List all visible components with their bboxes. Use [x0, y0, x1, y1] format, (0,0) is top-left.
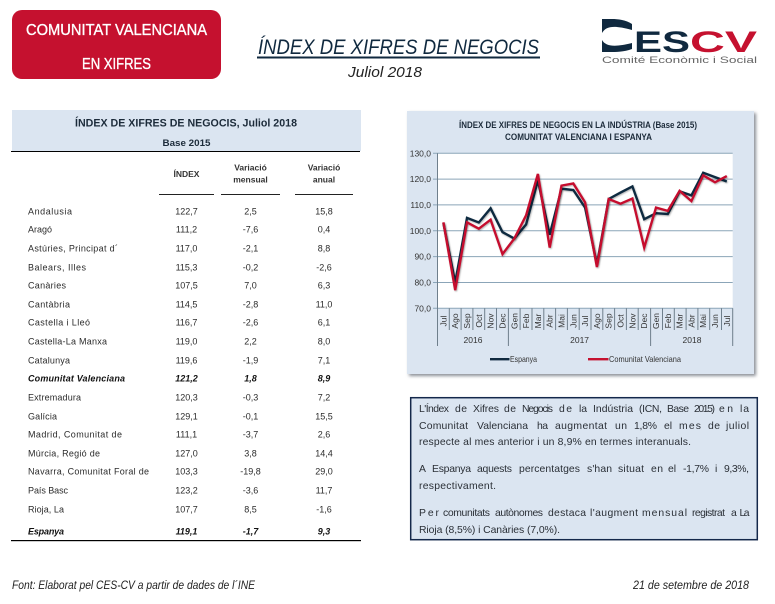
paragraph 2: respectivament. — [419, 481, 496, 492]
paragraph 1: de — [504, 404, 516, 415]
table rows: -0,2 — [243, 262, 258, 272]
table rows: 11,0 — [316, 300, 332, 310]
paragraph 1: de — [455, 404, 467, 415]
paragraph 3: registrat — [692, 508, 725, 519]
y axis labels: 130,0 — [410, 148, 431, 158]
paragraph 3: Per — [419, 508, 440, 519]
table rows: 8,0 — [318, 336, 330, 346]
table rows: 15,8 — [315, 206, 333, 216]
table heading: Base 2015 — [162, 138, 211, 149]
paragraph 2: el — [668, 464, 676, 475]
table rows: -1,7 — [243, 526, 259, 536]
table rows: 8,8 — [318, 244, 330, 254]
paragraph 1: mes — [679, 421, 701, 432]
subtitle: period: Juliol 2018 — [347, 64, 423, 81]
chart title: ÍNDEX DE XIFRES DE NEGOCIS EN LA INDÚSTRIA (Base 2015) — [459, 119, 697, 130]
panel: summary text — [411, 398, 757, 540]
paragraph 3: comunitats — [443, 508, 490, 519]
x axis month labels — [438, 313, 732, 329]
table rows: 123,2 — [175, 486, 198, 496]
table rows: País Basc — [28, 486, 68, 496]
x axis month labels: Sep — [604, 313, 614, 329]
table rows: 119,1 — [176, 526, 197, 536]
table rows: Andalusia — [28, 206, 72, 216]
paragraph 3: destaca — [548, 508, 586, 519]
table rows: Castella-La Manxa — [28, 336, 107, 346]
x axis month labels: Nov — [486, 313, 496, 329]
y axis labels: 110,0 — [410, 200, 431, 210]
table rows: -3,6 — [243, 486, 258, 496]
table rows: 111,1 — [176, 430, 197, 440]
table rows: -1,6 — [316, 504, 332, 514]
table rows — [28, 206, 333, 536]
logo: CES CV: ES — [634, 26, 690, 59]
paragraph 3: Rioja (8,5%) i Canàries (7,0%). — [419, 525, 560, 536]
column headers: Variació — [308, 162, 340, 172]
paragraph 3: a — [731, 508, 737, 519]
paragraph 1: Base — [667, 404, 689, 415]
table rows: 114,5 — [176, 300, 197, 310]
paragraph 1: un — [615, 421, 627, 432]
panel: data table — [11, 110, 361, 541]
x axis month labels: Jun — [710, 314, 720, 328]
paragraph 1: Xifres — [473, 404, 499, 415]
table rows: Cantàbria — [28, 300, 70, 310]
table rows: 2,2 — [244, 336, 257, 346]
table rows: -2,6 — [243, 318, 258, 328]
table rows: 0,4 — [318, 224, 330, 234]
series: Comunitat Valenciana — [443, 174, 727, 290]
logo: CES CV: Comité Econòmic i Social — [602, 55, 757, 66]
column headers: anual — [313, 174, 335, 184]
plot area — [438, 153, 733, 308]
paragraph 2: aquests — [477, 464, 512, 475]
column headers — [159, 162, 353, 195]
table heading — [11, 110, 361, 152]
x axis month labels: Dec — [639, 313, 649, 329]
y axis labels: 90,0 — [414, 252, 431, 262]
table rows: Aragó — [28, 224, 52, 234]
table rows: Comunitat Valenciana — [28, 374, 125, 384]
table rows: -2,8 — [243, 300, 258, 310]
paragraph 2: 9,3%, — [724, 464, 749, 475]
y axis labels: 120,0 — [410, 174, 431, 184]
x axis month labels: Mai — [698, 314, 708, 328]
table rows: -1,9 — [243, 356, 258, 366]
table rows: 122,7 — [175, 206, 198, 216]
table rows: 117,0 — [176, 244, 197, 254]
table rows: Navarra, Comunitat Foral de — [28, 466, 149, 476]
paragraph 1: L'Índex — [419, 402, 450, 415]
table rows: 6,1 — [318, 318, 330, 328]
table rows: 1,8 — [244, 374, 257, 384]
x axis month labels: Abr — [545, 314, 555, 328]
x axis month labels: Sep — [462, 313, 472, 329]
x axis month labels: Mai — [556, 314, 566, 328]
table rows: 119,6 — [176, 356, 197, 366]
table rows: 107,5 — [175, 280, 198, 290]
chart title: COMUNITAT VALENCIANA I ESPANYA — [505, 132, 652, 142]
paragraph 1: juliol — [725, 421, 749, 432]
paragraph 2: -1,7% — [683, 464, 709, 475]
column headers: mensual — [233, 174, 268, 184]
x axis month labels: Nov — [627, 313, 637, 329]
table rows: 14,4 — [315, 448, 333, 458]
table rows: 8,9 — [318, 374, 330, 384]
x axis month labels: Jun — [568, 314, 578, 328]
x axis month labels: Dec — [498, 313, 508, 329]
x axis month labels: Jul — [580, 315, 590, 326]
x axis year labels: 2017 — [570, 335, 589, 345]
x axis month labels: Oct — [474, 314, 484, 328]
badge: Comunitat Valenciana en xifres: COMUNITAT VALENCIANA — [26, 22, 208, 39]
paragraph 1: Valenciana — [477, 421, 528, 432]
paragraph 1: Indústria — [593, 404, 633, 415]
legend: Comunitat Valenciana — [609, 354, 681, 364]
paragraph 1: la — [740, 404, 749, 415]
table rows: Catalunya — [28, 356, 70, 366]
paragraph 2: percentatges — [519, 464, 580, 475]
paragraph 1: en — [719, 404, 733, 415]
table rows: Madrid, Comunitat de — [28, 430, 122, 440]
date: 21 de setembre de 2018 — [632, 580, 750, 592]
table rows: Extremadura — [28, 392, 81, 402]
badge: Comunitat Valenciana en xifres — [12, 10, 221, 79]
paragraph 1: Negocis — [522, 404, 553, 415]
table rows: 29,0 — [315, 466, 333, 476]
badge: Comunitat Valenciana en xifres: EN XIFRES — [82, 56, 151, 73]
paragraph 2: A — [419, 464, 426, 475]
table rows: 6,3 — [318, 280, 330, 290]
paragraph 3 — [419, 508, 750, 536]
table rows: 9,3 — [318, 526, 330, 536]
table rows: -3,7 — [243, 430, 258, 440]
paragraph 3: autònomes — [495, 508, 543, 519]
column headers: Variació — [234, 162, 267, 172]
table rows: 103,3 — [175, 466, 198, 476]
table rows: Rioja, La — [28, 504, 64, 514]
table rows: Espanya — [28, 526, 64, 536]
table rows: Múrcia, Regió de — [28, 448, 100, 458]
table rows: 119,0 — [176, 336, 197, 346]
table rows: Castella i Lleó — [28, 318, 90, 328]
x axis year labels — [464, 335, 702, 345]
table rows: Canàries — [28, 280, 66, 290]
table rows: 3,8 — [244, 448, 257, 458]
paragraph 1: el — [664, 421, 672, 432]
logo: CES CV: CV — [690, 26, 757, 59]
paragraph 3: La — [740, 508, 750, 519]
paragraph 1: Comunitat — [419, 421, 468, 432]
logo: CES CV — [602, 19, 757, 66]
x axis year labels: 2018 — [683, 335, 702, 345]
paragraph 2 — [419, 464, 749, 492]
paragraph 1: 2015) — [694, 404, 715, 415]
x axis month labels: Ago — [592, 313, 602, 329]
y axis labels: 70,0 — [414, 303, 431, 313]
table rows: 116,7 — [176, 318, 197, 328]
table rows: 120,3 — [175, 392, 198, 402]
paragraph 1: de — [708, 421, 720, 432]
table rows: Galícia — [28, 412, 57, 422]
series: Espanya — [443, 173, 727, 282]
paragraph 2: i — [715, 464, 717, 475]
paragraph 2: s'han — [587, 464, 612, 475]
table rows: 7,0 — [244, 280, 257, 290]
table rows: 121,2 — [175, 374, 198, 384]
table rows: 129,1 — [175, 412, 198, 422]
table rows: 115,3 — [176, 262, 197, 272]
y axis labels: 100,0 — [410, 226, 431, 236]
table rows: 15,5 — [315, 412, 333, 422]
table rows: -2,6 — [316, 262, 332, 272]
x axis year labels: 2016 — [464, 335, 483, 345]
paragraph 1: la — [579, 404, 587, 415]
x axis month labels: Feb — [521, 313, 531, 328]
x axis month labels: Gen — [651, 313, 661, 329]
paragraph 1: 1,8% — [634, 421, 657, 432]
x axis month labels: Jul — [438, 315, 448, 326]
paragraph 2: en — [651, 464, 663, 475]
legend: Espanya — [510, 354, 537, 364]
paragraph 1: respecte al mes anterior i un 8,9% en termes interanuals. — [419, 437, 691, 448]
paragraph 1 — [419, 402, 749, 448]
table rows: 7,2 — [318, 392, 330, 402]
table rows: 8,5 — [244, 504, 257, 514]
paragraph 1: (ICN, — [639, 404, 662, 415]
table rows: 111,2 — [176, 224, 197, 234]
x axis month labels: Feb — [663, 313, 673, 328]
title: ÍNDEX DE XIFRES DE NEGOCIS — [258, 36, 539, 59]
panel: line chart — [407, 111, 756, 376]
table rows: -0,1 — [243, 412, 258, 422]
x axis month labels: Ago — [450, 313, 460, 329]
table rows: 127,0 — [175, 448, 198, 458]
chart title — [459, 119, 697, 142]
paragraph 1: de — [559, 404, 572, 415]
table rows: -0,3 — [243, 392, 258, 402]
table heading: ÍNDEX DE XIFRES DE NEGOCIS, Juliol 2018 — [75, 116, 297, 130]
table rows: 2,6 — [318, 430, 330, 440]
x axis month labels: Oct — [616, 314, 626, 328]
y axis labels: 80,0 — [414, 278, 431, 288]
paragraph 1: augmentat — [555, 421, 607, 432]
table rows: -7,6 — [243, 224, 258, 234]
table rows: 7,1 — [318, 356, 330, 366]
x axis month labels: Jul — [722, 315, 732, 326]
legend — [490, 354, 681, 364]
table rows: 11,7 — [316, 486, 332, 496]
table rows: -2,1 — [243, 244, 258, 254]
table rows: Astúries, Principat d´ — [28, 244, 118, 254]
x axis month labels: Mar — [533, 314, 543, 328]
paragraph 2: Espanya — [432, 464, 471, 475]
paragraph 2: situat — [618, 464, 644, 475]
table rows: 2,5 — [244, 206, 257, 216]
paragraph 3: mensual — [642, 508, 687, 519]
x axis month labels: Mar — [675, 314, 685, 328]
y axis labels — [410, 148, 431, 313]
x axis month labels: Gen — [509, 313, 519, 329]
source note: Font: Elaborat pel CES-CV a partir de dades de l´INE — [12, 580, 255, 592]
x axis month labels: Abr — [686, 314, 696, 328]
paragraph 3: l'augment — [590, 508, 638, 519]
table rows: -19,8 — [240, 466, 261, 476]
column headers: ÍNDEX — [174, 169, 200, 179]
table rows: 107,7 — [175, 504, 198, 514]
table rows: Balears, Illes — [28, 262, 86, 272]
paragraph 1: ha — [537, 421, 548, 432]
